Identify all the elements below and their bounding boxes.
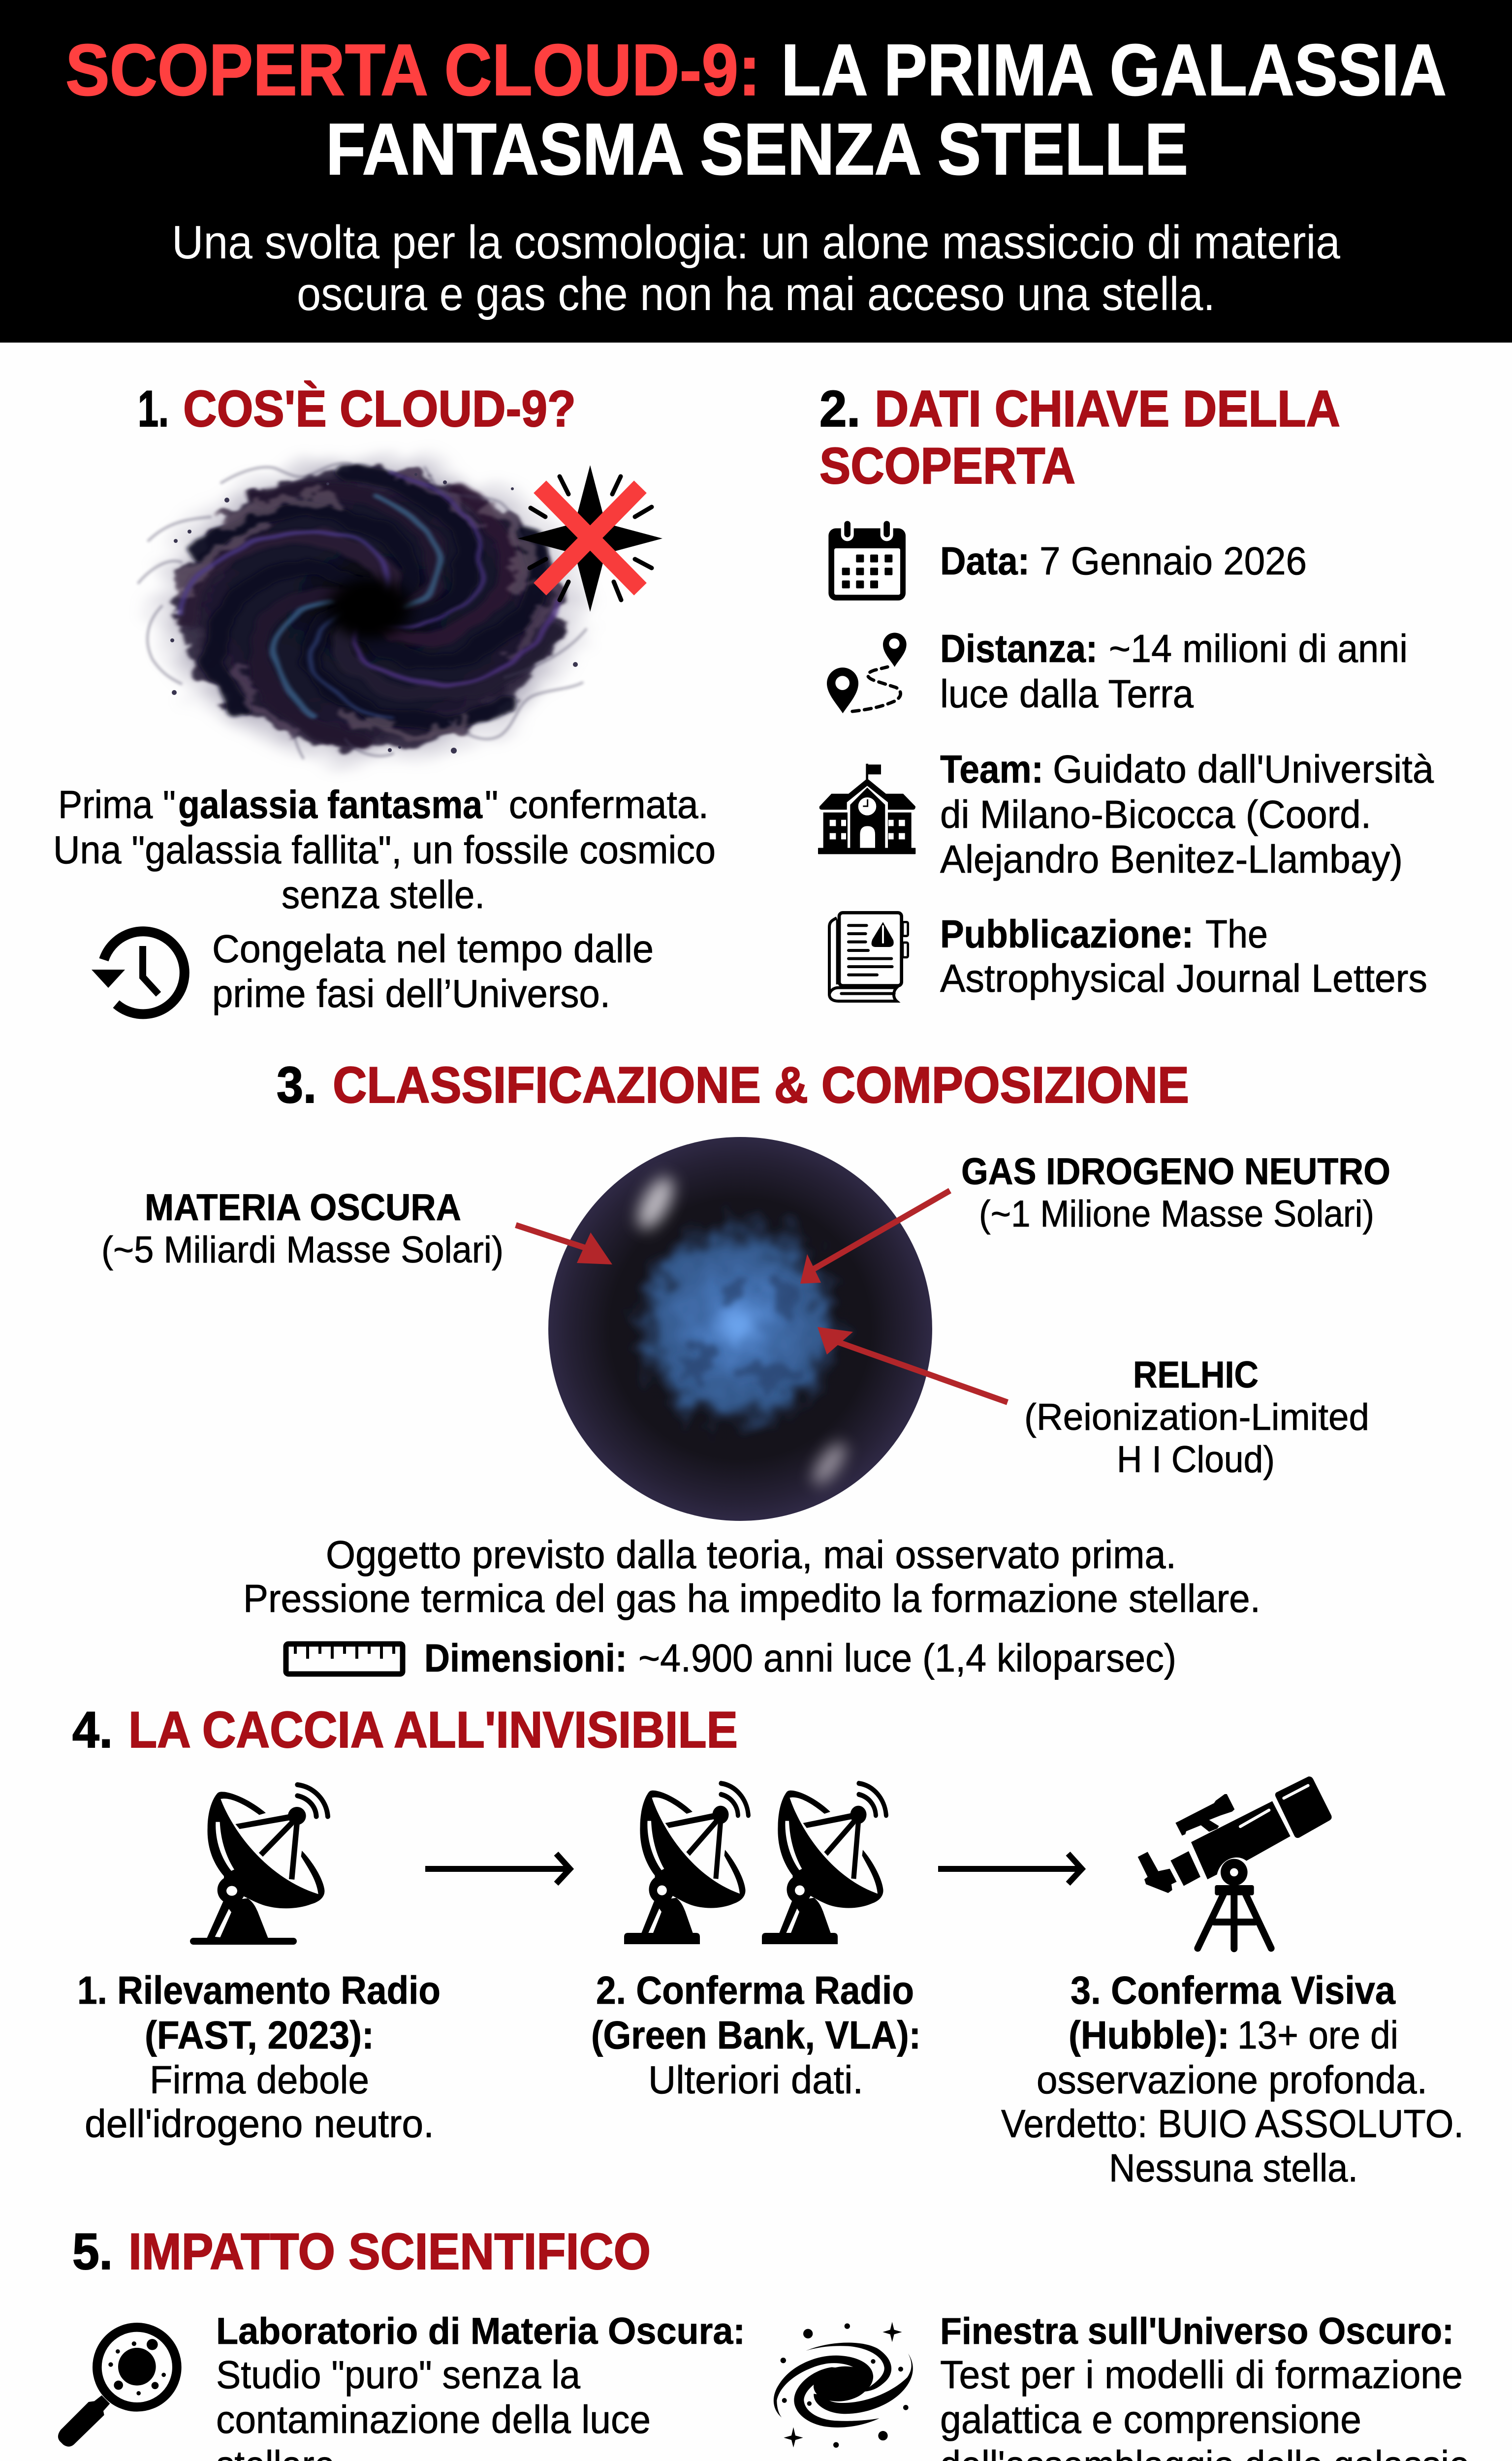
text: dimensions: ~4.900 anni luce (1,4 kiloparsec)	[638, 1636, 1176, 1680]
icon: crossed-out star	[518, 465, 662, 612]
text: description: galassia fantasma	[178, 783, 482, 826]
arrow: step 2 to step 3	[938, 1854, 1082, 1884]
icon: calendar	[828, 518, 906, 600]
text: step 2: Ulteriori dati.	[648, 2058, 863, 2102]
text: step 1: (FAST, 2023):	[145, 2013, 374, 2057]
icon: route with pins	[827, 632, 907, 713]
text: step 2: (Green Bank, VLA):	[591, 2013, 921, 2057]
text: step 3: (Hubble):	[1069, 2013, 1229, 2057]
text: team	[940, 747, 1434, 881]
icon: ruler	[286, 1644, 403, 1674]
label: dark matter: MATERIA OSCURA	[145, 1187, 461, 1229]
heading 2: 2.	[819, 380, 860, 438]
text: frozen in time: Congelata nel tempo dalle	[212, 927, 654, 971]
text: step 1: dell'idrogeno neutro.	[85, 2102, 434, 2145]
text: distance: Distanza:	[940, 627, 1098, 670]
arrow: to core	[818, 1327, 1008, 1402]
heading 5: IMPATTO SCIENTIFICO	[128, 2223, 651, 2280]
text: publication	[940, 912, 1427, 1000]
heading 2: SCOPERTA	[819, 438, 1075, 495]
title: LA PRIMA GALASSIA	[781, 30, 1447, 111]
heading 4: LA CACCIA ALL'INVISIBILE	[128, 1702, 738, 1759]
heading 4: 4.	[72, 1702, 113, 1759]
label: relhic: RELHIC	[1133, 1354, 1259, 1396]
icon: university building	[818, 764, 915, 854]
text: dark matter laboratory: Laboratorio di Materia Oscura:	[216, 2310, 745, 2352]
text: date: Data:	[940, 539, 1030, 583]
subtitle	[172, 216, 1341, 320]
label: neutral hydrogen gas: (~1 Milione Masse Solari)	[979, 1193, 1374, 1235]
text: date: 7 Gennaio 2026	[1040, 539, 1307, 583]
text: step 3: Verdetto: BUIO ASSOLUTO.	[1001, 2102, 1464, 2145]
heading 3: CLASSIFICAZIONE & COMPOSIZIONE	[333, 1057, 1189, 1114]
text: team: Team:	[940, 747, 1043, 791]
panel: section 1 cos'è cloud-9	[53, 380, 716, 1015]
title: SCOPERTA CLOUD-9:	[65, 30, 760, 111]
illustration: dark galaxy swirl	[138, 445, 593, 772]
text: step 2: 2. Conferma Radio	[596, 1968, 914, 2012]
text: dimensions	[424, 1636, 1176, 1680]
panel: section 4 the hunt	[72, 1702, 1464, 2190]
arrow: to dark matter	[516, 1225, 612, 1264]
text: step 3: 13+ ore di	[1237, 2013, 1398, 2057]
label: relhic	[1024, 1354, 1369, 1481]
heading 5: 5.	[72, 2223, 113, 2280]
text: dark matter laboratory: contaminazione della luce	[216, 2398, 651, 2441]
icon: radio dish FAST	[190, 1785, 328, 1945]
subtitle: oscura e gas che non ha mai acceso una stella.	[297, 268, 1215, 320]
text: publication: Astrophysical Journal Letters	[940, 956, 1427, 1000]
text: publication: The	[1205, 912, 1268, 956]
text: step 2	[591, 1968, 921, 2102]
text: team: Alejandro Benitez-Llambay)	[940, 837, 1403, 881]
heading 2	[819, 380, 1340, 495]
illustration: dark matter sphere with gas core	[548, 1137, 932, 1521]
text: frozen in time: prime fasi dell’Universo.	[212, 972, 610, 1015]
text: step 3: 3. Conferma Visiva	[1071, 1968, 1395, 2012]
text: dimensions: Dimensioni:	[424, 1636, 627, 1680]
text: step 1: 1. Rilevamento Radio	[77, 1968, 441, 2012]
text: window on the dark universe: Finestra sull'Universo Oscuro:	[940, 2310, 1454, 2352]
text: explanation: Pressione termica del gas ha impedito la formazione stellare.	[243, 1577, 1260, 1620]
title: FANTASMA SENZA STELLE	[326, 109, 1188, 190]
icon: history clock	[92, 931, 185, 1014]
text: step 3: Nessuna stella.	[1109, 2146, 1358, 2190]
label: neutral hydrogen gas	[961, 1151, 1390, 1235]
panel: section 5 scientific impact	[58, 2223, 1480, 2461]
text: step 1: Firma debole	[150, 2058, 369, 2102]
label: relhic: (Reionization-Limited	[1024, 1396, 1369, 1438]
subtitle: Una svolta per la cosmologia: un alone massiccio di materia	[172, 216, 1341, 269]
text: window on the dark universe: galattica e comprensione	[940, 2398, 1361, 2441]
text: description: senza stelle.	[282, 873, 485, 916]
text: dark matter laboratory: Studio "puro" senza la	[216, 2353, 580, 2397]
icon: spiral galaxy	[774, 2322, 913, 2448]
text: distance	[940, 627, 1408, 716]
heading 3: 3.	[277, 1057, 316, 1114]
heading 2: DATI CHIAVE DELLA	[875, 380, 1340, 438]
icon: twin radio dishes	[624, 1783, 886, 1944]
title	[65, 30, 1447, 190]
text: step 3	[1001, 1968, 1464, 2190]
text: frozen in time	[212, 927, 654, 1015]
text: distance: luce dalla Terra	[940, 672, 1194, 716]
label: dark matter: (~5 Miliardi Masse Solari)	[101, 1229, 504, 1271]
text: description	[53, 783, 716, 916]
text: description: Prima "	[58, 783, 176, 826]
text: explanation: Oggetto previsto dalla teoria, mai osservato prima.	[326, 1533, 1176, 1577]
text: window on the dark universe: Test per i modelli di formazione	[940, 2353, 1463, 2397]
text: distance: ~14 milioni di anni	[1109, 627, 1408, 670]
text: window on the dark universe	[940, 2310, 1480, 2461]
text: dark matter laboratory	[216, 2310, 745, 2461]
icon: magnifier on dark matter	[58, 2327, 177, 2447]
label: relhic: H I Cloud)	[1117, 1439, 1275, 1481]
text: step 3: osservazione profonda.	[1037, 2058, 1427, 2102]
label: neutral hydrogen gas: GAS IDROGENO NEUTRO	[961, 1151, 1390, 1193]
text: description: " confermata.	[485, 783, 709, 826]
panel: header band	[0, 0, 1512, 343]
arrow: to gas	[800, 1191, 950, 1284]
label: dark matter	[101, 1187, 504, 1271]
icon: journal book	[829, 913, 908, 1001]
text: description: Una "galassia fallita", un fossile cosmico	[53, 828, 716, 872]
heading 1: 1.	[138, 380, 169, 438]
panel: section 2 key data	[818, 380, 1434, 1001]
text: publication: Pubblicazione:	[940, 912, 1194, 956]
arrow: step 1 to step 2	[425, 1854, 570, 1884]
text: team: Guidato dall'Università	[1053, 747, 1434, 791]
heading 1: COS'È CLOUD-9?	[183, 380, 576, 438]
text: team: di Milano-Bicocca (Coord.	[940, 792, 1371, 836]
text: step 1	[77, 1968, 441, 2145]
text: explanation	[243, 1533, 1260, 1620]
panel: section 3 classification and composition	[101, 1057, 1390, 1680]
icon: telescope	[1138, 1776, 1332, 1949]
